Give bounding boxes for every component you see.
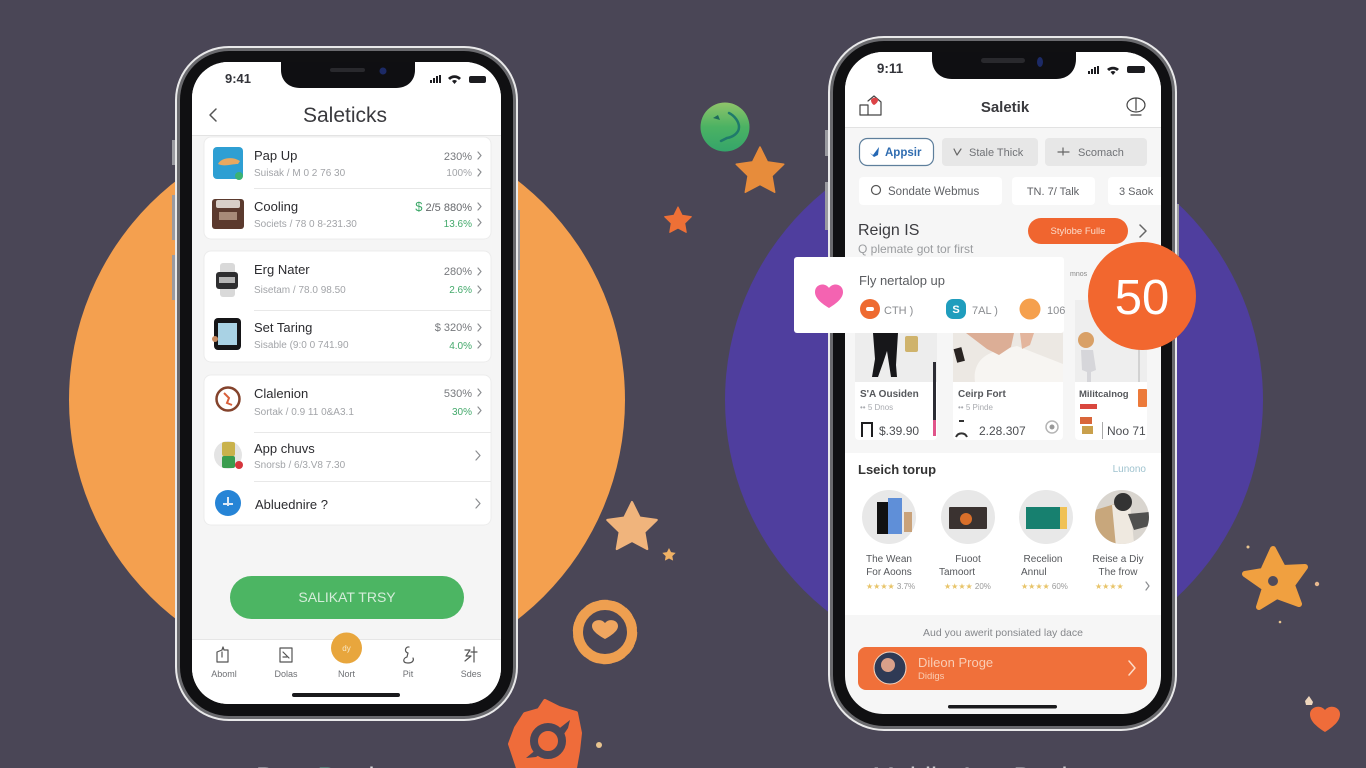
notch — [932, 52, 1076, 79]
product cards — [855, 271, 1147, 440]
small dots — [596, 742, 602, 748]
tab: Scomach — [1045, 138, 1147, 166]
tab: Nort active — [331, 632, 362, 679]
item: Reise a Diy: The frow — [1099, 567, 1138, 578]
item: Recelion Annul — [1019, 490, 1073, 591]
row: Clalenion: Clalenion — [254, 386, 308, 401]
tab: Appsir: Appsir — [885, 147, 922, 159]
item: Recelion Annul: ★★★★ 60% — [1021, 582, 1068, 591]
product card 3 — [1075, 300, 1147, 440]
icon: note — [862, 423, 872, 437]
item: The Wean: The Wean — [866, 554, 912, 565]
row: Pap Up: 100% — [446, 168, 472, 179]
green button: SALIKAT TRSY — [298, 589, 396, 605]
screen — [845, 52, 1168, 714]
product card 3: Militcalnog — [1079, 389, 1129, 400]
app header: Saletik — [981, 99, 1030, 116]
section: Lseich torup — [845, 453, 1161, 615]
row: Cooling: Cooling — [254, 199, 298, 214]
product card 2: Ceirp Fort — [958, 389, 1006, 400]
badge: 7AL — [946, 299, 998, 319]
product card 2 — [953, 300, 1063, 440]
item: Recelion Annul: Recelion — [1024, 554, 1062, 565]
icon: peach star — [607, 502, 657, 549]
purple circle backdrop — [725, 131, 1263, 669]
badge: 7AL: S — [952, 304, 960, 316]
product cards: mnos — [1070, 271, 1088, 278]
tab: Scomach: Scomach — [1078, 147, 1124, 159]
row: Set Taring: Sisable (9:0 0 741.90 — [254, 340, 349, 351]
row: Abluednire — [215, 490, 480, 516]
home indicator — [948, 705, 1057, 708]
chevron — [1140, 225, 1146, 237]
tab: Dolas: Dolas — [274, 669, 298, 679]
tab: Aboml: Aboml — [211, 669, 237, 679]
section heading: Reign IS: Q plemate got tor first — [858, 242, 974, 256]
row: Erg Nater: 2.6% — [449, 285, 472, 296]
item: Reise a Diy — [1092, 490, 1149, 591]
status icons — [1088, 66, 1145, 75]
side buttons — [825, 130, 1179, 256]
status time: 9:11 — [877, 61, 904, 76]
tab: Pit — [403, 647, 414, 679]
badge: 50: 50 — [1115, 271, 1169, 325]
chip: 3 Saok — [1108, 177, 1168, 205]
row: Cooling: 13.6% — [444, 219, 472, 230]
row: Erg Nater: Sisetam / 78.0 98.50 — [254, 285, 346, 296]
orange promo bar — [858, 647, 1147, 690]
row: App chuvs — [214, 441, 480, 471]
orange pill button: Stylobe Fulle — [1051, 226, 1105, 237]
icon: coral heart — [1310, 707, 1340, 732]
product card 1: •• 5 Dnos — [860, 403, 893, 412]
status icons — [430, 75, 486, 84]
item: Fuoot Tamoort: ★★★★ 20% — [944, 582, 991, 591]
section heading: Reign IS — [858, 222, 974, 256]
list card 3 — [204, 375, 491, 525]
item: Fuoot Tamoort: Fuoot — [955, 554, 981, 565]
product card 1: S'A Ousiden — [860, 389, 919, 400]
tab: Nort active: dy — [342, 644, 351, 653]
floating notification card: Fly nertalop up — [859, 273, 945, 288]
phone: right shop screen — [825, 36, 1179, 731]
badge: CTH — [860, 299, 913, 319]
status time: 9:41 — [225, 71, 251, 86]
product card 1 — [855, 300, 937, 440]
notch — [281, 62, 415, 88]
row: Clalenion: Sortak / 0.9 11 0&A3.1 — [254, 407, 354, 418]
chip: Sondate Webmus: Sondate Webmus — [888, 186, 979, 198]
section: Lseich torup: Lseich torup — [858, 462, 936, 477]
orange pill button — [1028, 218, 1128, 244]
icon: green circle — [700, 102, 750, 152]
row: Set Taring: $ 320% — [435, 322, 472, 334]
row: Cooling: Societs / 78 0 8-231.30 — [254, 219, 357, 230]
row: Clalenion: 530% — [444, 388, 472, 400]
tab: Pit: Pit — [403, 669, 414, 679]
item: Reise a Diy: ★★★★ — [1095, 582, 1124, 591]
badge: 106: 106 — [1047, 305, 1065, 317]
row: Set Taring: Set Taring — [254, 320, 312, 335]
tab: Appsir — [860, 138, 934, 166]
item: Recelion Annul: Annul — [1021, 567, 1047, 578]
row: App chuvs: Snorsb / 6/3.V8 7.30 — [254, 460, 346, 471]
chip: Sondate Webmus — [859, 177, 1002, 205]
row: Cooling: $ 2/5 880% — [415, 199, 472, 214]
icon: shop heart — [860, 96, 881, 115]
icon: cream dot — [1305, 696, 1313, 705]
tab: Nort active: Nort — [338, 669, 355, 679]
row: Clalenion: 30% — [452, 407, 472, 418]
app header — [192, 62, 501, 136]
badge: 50 — [1088, 242, 1196, 350]
icon: orange rocket badge — [510, 701, 580, 768]
tab: Dolas — [274, 648, 298, 679]
screen — [192, 62, 501, 704]
floating notification card — [794, 257, 1065, 333]
phone: left sales list — [172, 46, 520, 721]
tab: Stale Thick — [942, 138, 1038, 166]
item: The Wean: For Aoons — [866, 567, 912, 578]
badge: 7AL: 7AL ) — [972, 305, 998, 317]
tab bar — [192, 632, 501, 704]
row: App chuvs: App chuvs — [254, 441, 315, 456]
app header: Saleticks — [303, 104, 387, 127]
item: The Wean — [862, 490, 916, 591]
row: Pap Up — [213, 147, 481, 180]
section: Lseich torup: Lunono — [1113, 464, 1146, 475]
home indicator — [292, 693, 400, 697]
green button — [230, 576, 464, 619]
tab: Aboml — [211, 647, 237, 679]
icon: orange star — [736, 147, 784, 192]
item: Fuoot Tamoort — [939, 490, 995, 591]
row: Pap Up: 230% — [444, 151, 472, 163]
side buttons — [172, 140, 520, 300]
row: Abluednire: Abluednire ? — [255, 497, 328, 512]
badge: CTH: CTH ) — [884, 305, 913, 317]
list card 1 — [204, 137, 491, 239]
item: Fuoot Tamoort: Tamoort — [939, 567, 975, 578]
row: Cooling — [212, 199, 481, 230]
decorative icons between phones — [665, 102, 784, 232]
tab: Sdes: Sdes — [461, 669, 482, 679]
icon: pink heart — [815, 285, 843, 308]
item: Reise a Diy: Reise a Diy — [1092, 554, 1144, 565]
icon: outlined star — [1245, 549, 1305, 607]
row: Erg Nater: 280% — [444, 266, 472, 278]
product card 3: Noo 71 — [1107, 424, 1146, 438]
row: Pap Up: Suisak / M 0 2 76 30 — [254, 168, 346, 179]
section heading: Reign IS: Reign IS — [858, 222, 919, 239]
chip row — [859, 177, 1168, 205]
row: Pap Up: Pap Up — [254, 148, 297, 163]
phone frame — [175, 46, 518, 721]
row: Set Taring: 4.0% — [449, 341, 472, 352]
decorative icons right side — [1245, 546, 1340, 732]
orange promo bar: Dileon Proge — [918, 655, 993, 670]
row: Set Taring — [212, 318, 481, 352]
icon: small sparkle — [662, 548, 676, 561]
icon: heart badge — [574, 601, 636, 663]
list card 2 — [204, 251, 491, 362]
app header — [845, 52, 1161, 128]
chip: date — [1012, 177, 1095, 205]
row: Erg Nater — [216, 262, 481, 297]
tab: Stale Thick: Stale Thick — [969, 147, 1024, 159]
decorative icons around left phone — [510, 502, 676, 768]
tab: Sdes — [461, 647, 482, 679]
badge: 106 — [1020, 298, 1065, 320]
product card 2: 2.28.307 — [979, 424, 1026, 438]
orange circle backdrop — [69, 122, 625, 678]
icon: globe — [1127, 98, 1145, 115]
item: The Wean: ★★★★ 3.7% — [866, 582, 915, 591]
filter tabs — [860, 138, 1147, 166]
phone frame — [828, 36, 1177, 731]
product card 1: $.39.90 — [879, 424, 919, 438]
promo caption: Aud you awerit ponsiated lay dace — [923, 627, 1083, 639]
icon: small orange star — [665, 207, 691, 232]
chip: 3 Saok: 3 Saok — [1119, 186, 1154, 198]
row: Erg Nater: Erg Nater — [254, 262, 310, 277]
product card 2: •• 5 Pinde — [958, 403, 994, 412]
orange promo bar: Didigs — [918, 671, 945, 682]
chip: date: TN. 7/ Talk — [1027, 186, 1080, 198]
row: Clalenion — [216, 386, 481, 418]
